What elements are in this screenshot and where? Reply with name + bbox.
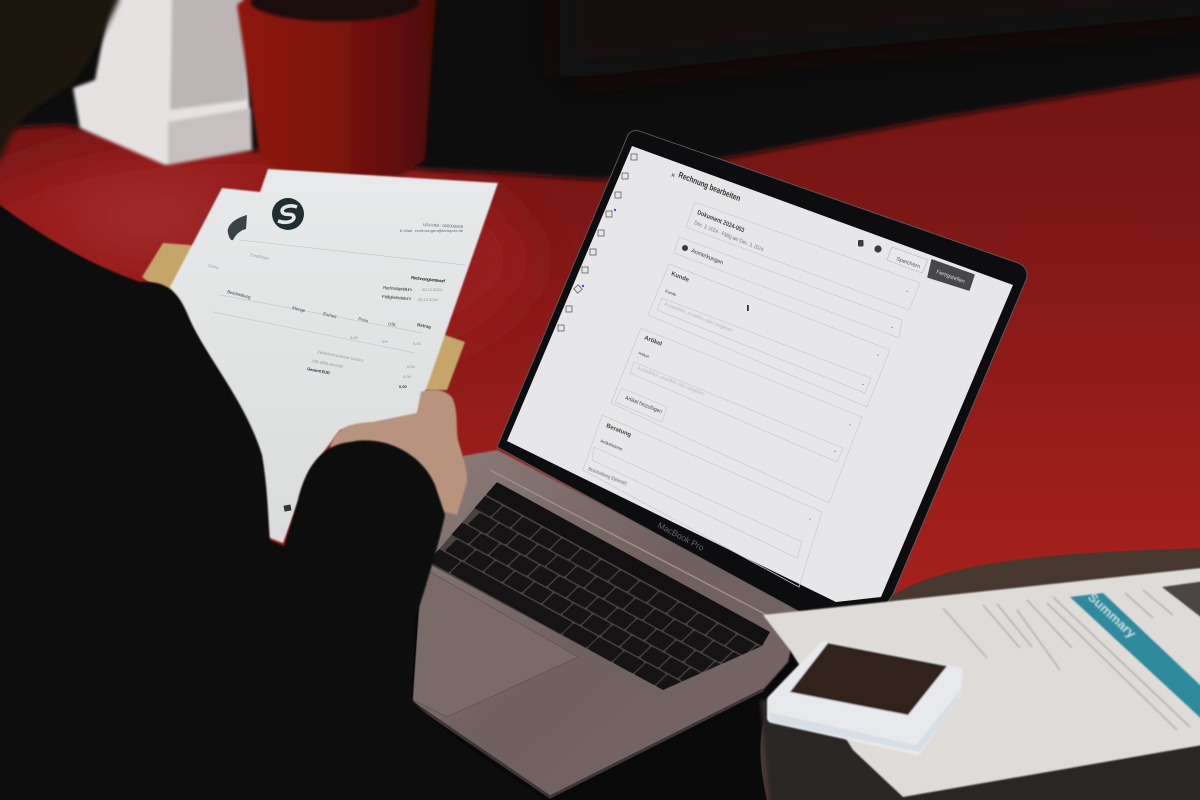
form labels bbox=[587, 245, 733, 487]
invoice totals: 0,00 bbox=[403, 374, 412, 379]
button: Speichern bbox=[887, 247, 928, 273]
invoice totals: Zwischensumme (netto) bbox=[317, 349, 365, 363]
chevrons: ⌃ bbox=[848, 424, 852, 430]
chevrons bbox=[808, 288, 909, 524]
floor sheen bbox=[70, 180, 230, 250]
pedestal shaded side bbox=[170, 0, 247, 110]
invoice meta: 20.12.2024 bbox=[422, 287, 443, 292]
screen heading: × bbox=[669, 170, 677, 181]
sheet paper bbox=[170, 169, 498, 543]
invoice totals: 0% bbox=[382, 339, 388, 344]
device side bbox=[768, 690, 960, 752]
invoice sender details bbox=[400, 222, 464, 233]
chevrons: ⌄ bbox=[833, 448, 837, 454]
device body bbox=[772, 646, 958, 750]
button: Fertigstellen bbox=[928, 260, 974, 290]
icon: invoice logo bbox=[272, 198, 304, 230]
screen heading bbox=[669, 169, 742, 203]
chevrons: ⌄ bbox=[861, 381, 865, 387]
invoice table header: Einheit bbox=[323, 311, 338, 319]
form labels: Auswählen, erstellen oder eingeben bbox=[663, 301, 733, 334]
screen bbox=[507, 146, 1013, 602]
invoice meta: Fälligkeitsdatum bbox=[382, 294, 412, 301]
white pedestal bbox=[73, 0, 252, 165]
form labels: Artikel bbox=[638, 350, 650, 359]
button: Fertigstellen: Fertigstellen bbox=[935, 269, 966, 285]
invoice sheets bbox=[170, 169, 498, 543]
paper sheet bbox=[763, 566, 1200, 797]
hand holding invoice bbox=[330, 390, 467, 515]
chevrons: ⌃ bbox=[876, 354, 880, 360]
left floor tone bbox=[0, 140, 530, 380]
document summary text: Dokument 2024-003 bbox=[696, 209, 745, 235]
dark sofa bbox=[0, 0, 1200, 180]
invoice recipient labels: Firma bbox=[208, 263, 220, 270]
invoice sender details: E-Mail: rechnungen@beispiel.de bbox=[400, 228, 464, 233]
form labels: Kunde bbox=[670, 271, 690, 284]
app sidebar icons bbox=[558, 154, 637, 331]
paper text lines bbox=[943, 590, 1190, 730]
keyboard bbox=[431, 482, 770, 690]
pot interior bbox=[250, 0, 420, 22]
bottom row keys and space bar bbox=[432, 549, 681, 690]
screen heading: Rechnung bearbeiten bbox=[677, 169, 742, 203]
invoice table header: USt. bbox=[388, 321, 397, 327]
person head bbox=[0, 0, 119, 170]
round table bbox=[760, 548, 1200, 800]
photo corner bbox=[1162, 579, 1200, 632]
icon: settings bbox=[874, 245, 882, 253]
invoice totals: USt. (0%) von 0,00 bbox=[312, 358, 344, 369]
laptop base bbox=[413, 450, 800, 797]
invoice table header: Menge bbox=[292, 305, 307, 313]
invoice table header: Betrag bbox=[417, 322, 432, 329]
form labels: Anmerkungen bbox=[690, 248, 724, 266]
invoice table header: Preis bbox=[358, 316, 369, 324]
card reader device bbox=[768, 643, 960, 752]
invoice sender details: USt-IdNr.: 000000000 bbox=[423, 222, 464, 229]
summary paper on table bbox=[763, 566, 1200, 797]
pedestal column and base bbox=[73, 0, 252, 165]
manila folder bbox=[142, 243, 465, 390]
form labels: Artikelname bbox=[600, 438, 624, 452]
invoice totals bbox=[307, 335, 422, 389]
pot body bbox=[237, 0, 436, 176]
document summary text bbox=[693, 209, 764, 253]
hinge highlight bbox=[490, 470, 780, 622]
form labels: Auswählen, erstellen oder eingeben bbox=[636, 365, 705, 398]
form labels: Kunde bbox=[665, 288, 678, 298]
device screen bbox=[790, 643, 947, 715]
lap and desk shadow bbox=[395, 540, 810, 800]
button: Speichern: Speichern bbox=[895, 256, 921, 270]
invoice totals: 0,00 bbox=[399, 384, 408, 389]
invoice meta: 20.12.2024 bbox=[418, 297, 439, 302]
form labels: Beratung bbox=[605, 423, 632, 439]
screen bezel bbox=[497, 131, 1027, 612]
banner heading: Summary bbox=[1085, 589, 1140, 642]
person body and sleeve bbox=[0, 195, 560, 800]
teal banner bbox=[1070, 593, 1200, 736]
form labels: Artikel hinzufügen bbox=[624, 395, 662, 415]
key rows bbox=[446, 496, 760, 682]
mouse cursor bbox=[747, 305, 749, 311]
document summary text: Dec. 3, 2024 · Fällig am Dec. 3, 2024 bbox=[693, 220, 764, 253]
form labels: Beschreibung (Optional) bbox=[587, 466, 628, 487]
base front edge bbox=[413, 690, 763, 797]
icon: rear sheet logo fragment bbox=[228, 215, 247, 240]
table lower shadow bbox=[760, 690, 1200, 800]
invoice totals: Gesamt EUR bbox=[307, 366, 330, 375]
invoice meta: Rechnungsentwurf bbox=[411, 275, 446, 284]
invoice recipient labels: Empfänger bbox=[250, 252, 271, 261]
form labels: Artikel bbox=[643, 335, 663, 348]
invoice table header bbox=[227, 289, 432, 329]
laptop brand text: MacBook Pro bbox=[656, 520, 706, 553]
trackpad bbox=[413, 567, 578, 717]
invoice recipient labels bbox=[208, 252, 271, 270]
chevrons: ⌄ bbox=[890, 324, 894, 330]
laptop bbox=[413, 131, 1027, 797]
chevrons: ⌄ bbox=[905, 288, 909, 294]
form cards bbox=[583, 202, 920, 587]
invoice totals: 0,00 bbox=[413, 341, 422, 346]
chevrons: ⌃ bbox=[808, 518, 812, 524]
red plant pot bbox=[237, 0, 436, 176]
invoice totals: 0,00 bbox=[350, 335, 359, 340]
sofa brown tone bbox=[560, 0, 1200, 80]
icon: lock bbox=[858, 240, 864, 246]
invoice table header: Beschreibung bbox=[227, 289, 252, 300]
invoice totals: 0,00 bbox=[407, 364, 416, 369]
touch bar bbox=[486, 482, 770, 646]
invoice meta bbox=[382, 275, 446, 302]
invoice footer mark bbox=[284, 505, 291, 512]
pedestal base shaded side bbox=[168, 108, 252, 165]
invoice meta: Rechnungsdatum bbox=[383, 285, 413, 292]
